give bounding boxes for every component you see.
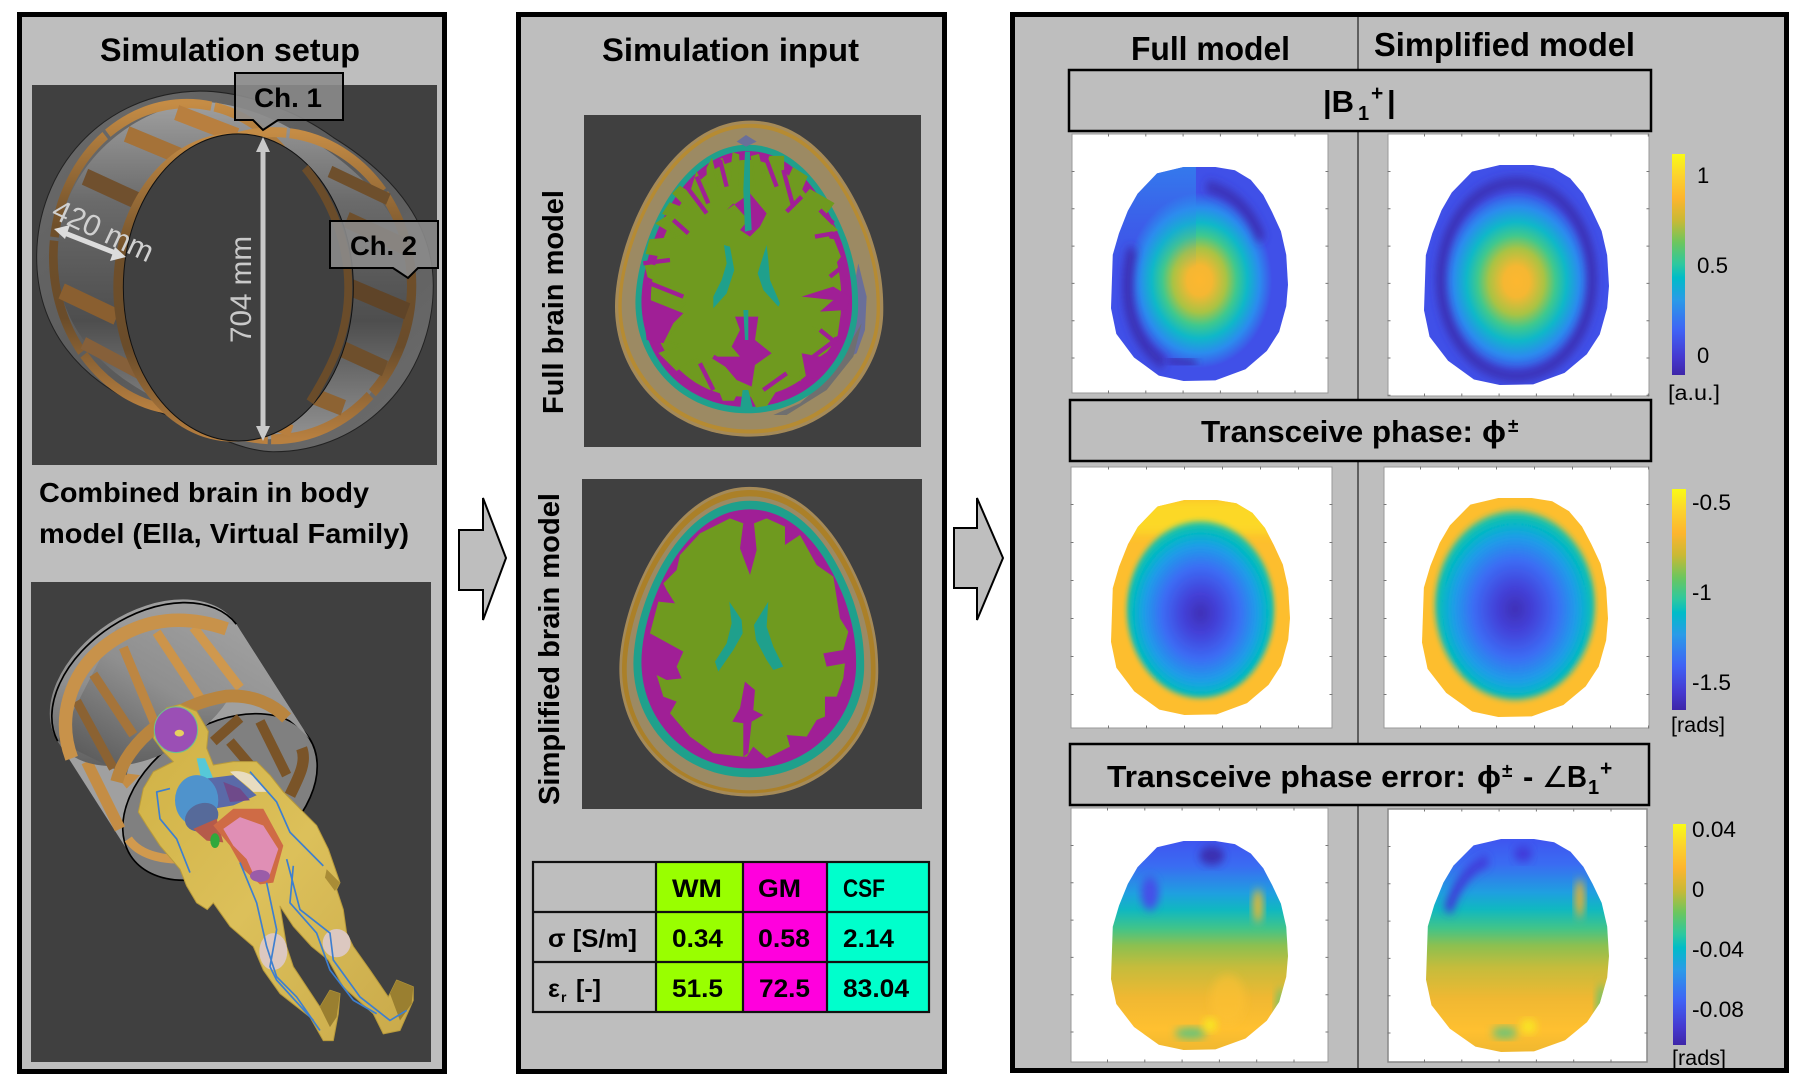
header: transceive phase error: + <box>1600 757 1612 780</box>
label: 420 mm: 420 mm <box>47 193 159 269</box>
header: transceive phase <box>1070 400 1651 461</box>
table: tissue properties: ε <box>548 975 560 1003</box>
header: transceive phase error: ± <box>1502 761 1512 782</box>
heatmap: error full model <box>1071 808 1328 1062</box>
image: full brain model <box>584 115 921 447</box>
header: transceive phase: ± <box>1508 416 1518 437</box>
arrow: setup to input <box>459 498 506 620</box>
colorbar: B1: 1 <box>1697 163 1709 188</box>
panel: simulation input <box>518 14 944 1072</box>
header: transceive phase error: ∠ <box>1542 760 1568 794</box>
heatmap: B1 simplified model <box>1388 134 1649 396</box>
arrow: 420 mm <box>54 225 126 261</box>
colorbar: error: 0 <box>1692 877 1704 902</box>
image: simplified brain model <box>582 479 922 809</box>
heatmap: error simplified model <box>1388 809 1647 1062</box>
header: transceive phase error: B <box>1567 759 1587 794</box>
text block: combined brain in body model: model (Ella, Virtual Family) <box>39 518 409 549</box>
panel: results <box>1012 14 1786 1070</box>
table: tissue properties: CSF <box>843 875 885 903</box>
callout: channel 2 <box>330 221 438 278</box>
colorbar: phase: [rads] <box>1671 714 1725 737</box>
colorbar: B1 <box>1668 154 1728 405</box>
image: body in coil <box>19 565 431 1062</box>
heading: simplified model: Simplified model <box>1374 26 1635 63</box>
callout: channel 2: Ch. 2 <box>350 231 417 261</box>
heatmap: B1 full model <box>1072 134 1328 393</box>
label: 704 mm: 704 mm <box>225 236 258 343</box>
header: B1 magnitude <box>1069 70 1651 131</box>
heading: full model: Full model <box>1131 30 1290 67</box>
table: tissue properties: 83.04 <box>843 975 909 1003</box>
header: transceive phase error: - <box>1523 759 1533 794</box>
header: B1 magnitude: |B <box>1323 84 1354 119</box>
table: tissue properties: 0.34 <box>672 925 723 953</box>
colorbar: error <box>1672 817 1744 1070</box>
table: tissue properties: σ [S/m] <box>548 925 637 953</box>
heatmap: phase simplified model <box>1384 467 1649 728</box>
heading: simulation setup: Simulation setup <box>100 32 360 68</box>
callout: channel 1: Ch. 1 <box>254 83 322 113</box>
text block: combined brain in body model <box>39 477 409 549</box>
figure: body model <box>138 705 413 1041</box>
table: tissue properties: GM <box>758 875 801 903</box>
arrow: 704 mm <box>256 137 270 441</box>
header: B1 magnitude: | <box>1387 84 1396 119</box>
colorbar: B1: 0.5 <box>1697 253 1728 278</box>
table: tissue properties: WM <box>672 875 722 903</box>
table: tissue properties: [-] <box>576 975 601 1003</box>
colorbar: error: 0.04 <box>1692 817 1736 842</box>
colorbar: phase <box>1671 489 1731 737</box>
colorbar: error: -0.04 <box>1692 937 1744 962</box>
header: transceive phase: Transceive phase: <box>1201 414 1473 449</box>
colorbar: B1: [a.u.] <box>1668 382 1720 405</box>
image: coil cylinder <box>32 73 438 465</box>
table: tissue properties: 51.5 <box>672 975 723 1003</box>
header: transceive phase error: 1 <box>1588 777 1599 799</box>
panel: simulation setup <box>19 14 444 1072</box>
header: transceive phase error: ϕ <box>1477 759 1501 794</box>
colorbar: error: -0.08 <box>1692 997 1744 1022</box>
colorbar: phase: -1 <box>1692 580 1712 605</box>
label: simplified brain model: Simplified brain model <box>534 493 566 805</box>
header: B1 magnitude: 1 <box>1358 103 1369 125</box>
label: full brain model: Full brain model <box>538 190 570 414</box>
colorbar: B1: 0 <box>1697 343 1709 368</box>
table: tissue properties: r <box>561 989 567 1005</box>
header: B1 magnitude: + <box>1371 82 1383 105</box>
header: transceive phase: ϕ <box>1482 414 1506 449</box>
colorbar: error: [rads] <box>1672 1047 1726 1070</box>
colorbar: phase: -0.5 <box>1692 490 1731 515</box>
colorbar: phase: -1.5 <box>1692 670 1731 695</box>
table: tissue properties: 0.58 <box>758 925 810 953</box>
heatmap: phase full model <box>1071 467 1332 728</box>
arrow: input to results <box>954 498 1003 620</box>
table: tissue properties <box>533 862 929 1012</box>
heading: simulation input: Simulation input <box>602 32 859 68</box>
table: tissue properties: 2.14 <box>843 925 894 953</box>
callout: channel 1 <box>235 73 343 130</box>
header: transceive phase error <box>1070 744 1649 805</box>
header: transceive phase error: Transceive phase error: <box>1107 759 1466 794</box>
table: tissue properties: 72.5 <box>759 975 810 1003</box>
text block: combined brain in body model: Combined brain in body <box>39 477 369 508</box>
